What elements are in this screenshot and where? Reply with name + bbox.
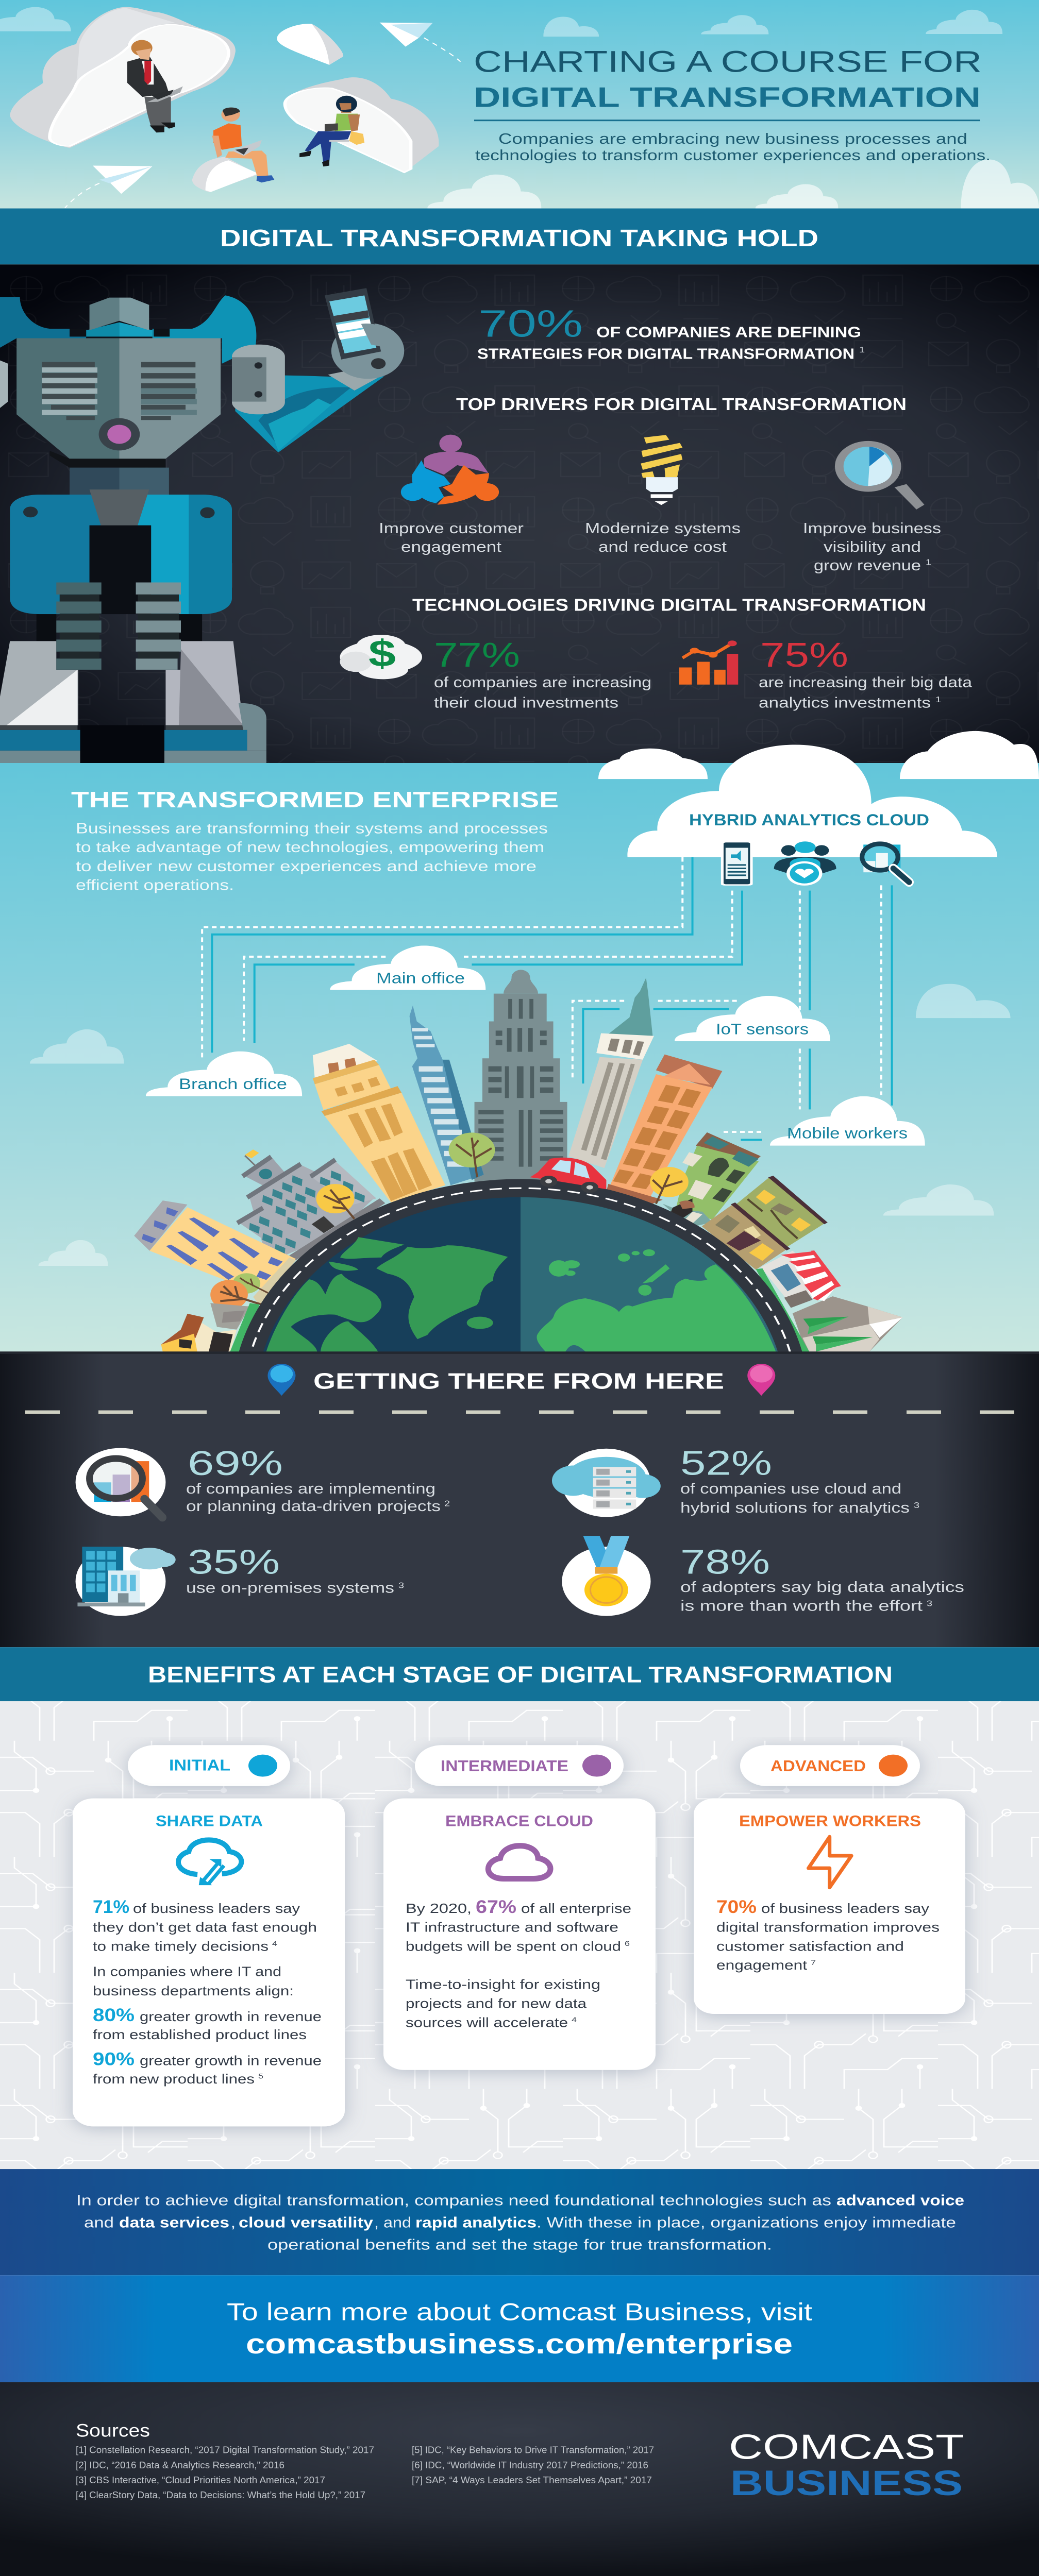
- land: western hemisphere: [266, 1237, 508, 1351]
- card: share data: 71%: [93, 1896, 129, 1917]
- subtitle: technologies to transform customer experiences and operations.: [475, 147, 991, 164]
- panel: transformed enterprise sky: [0, 731, 1039, 1621]
- stat: 78% worth the effort: [680, 1543, 964, 1615]
- stat: 69% data-driven projects: or planning data-driven projects: [186, 1498, 441, 1515]
- person: man in suit: [127, 40, 183, 132]
- building: olive townhouse: [702, 1176, 828, 1270]
- card: share data: from established product lines: [93, 2028, 307, 2042]
- card: share data: greater growth in revenue: [140, 2054, 322, 2069]
- text: modernize systems: [585, 520, 741, 555]
- card: share data: to make timely decisions: [93, 1939, 269, 1954]
- card: embrace cloud: By 2020,: [406, 1901, 472, 1916]
- heading band: digital transformation taking hold: [0, 209, 1039, 264]
- icon: magnifier: [835, 441, 925, 510]
- text: improve customer engagement: Improve customer: [379, 520, 524, 537]
- title: DIGITAL TRANSFORMATION: [474, 81, 981, 113]
- land: eastern hemisphere: [537, 1249, 776, 1351]
- heading: getting there from here: GETTING THERE FROM HERE: [313, 1368, 724, 1394]
- text: modernize systems: and reduce cost: [598, 538, 727, 555]
- label: hybrid analytics cloud: HYBRID ANALYTICS CLOUD: [689, 811, 929, 829]
- illustration: people on clouds: [10, 7, 461, 208]
- trees: centre: [448, 1132, 689, 1204]
- illustration: red car: [530, 1158, 606, 1193]
- heading band: digital transformation taking hold: DIGITAL TRANSFORMATION TAKING HOLD: [220, 226, 818, 251]
- stat: 69% data-driven projects: 69%: [188, 1445, 283, 1483]
- card: embrace cloud: 4: [572, 2016, 577, 2024]
- panel: foundational technologies: operational benefits and set the stage for true transformation.: [267, 2236, 772, 2253]
- pill: advanced: ADVANCED: [770, 1757, 866, 1775]
- card: embrace cloud: Time-to-insight for existing: [406, 1977, 600, 1992]
- icon: cloud servers: [552, 1449, 661, 1517]
- heading: sources: Sources: [76, 2420, 150, 2441]
- cloud: small bottom: [192, 157, 258, 192]
- panel: benefits circuit background: [0, 1701, 1039, 2169]
- globe and road: [232, 1179, 809, 1621]
- text: improve business visibility: Improve business: [803, 520, 941, 537]
- icon: data magnifier: [76, 1448, 165, 1517]
- callout: iot sensors: IoT sensors: [716, 1021, 809, 1038]
- stat: 69% data-driven projects: 2: [444, 1499, 450, 1508]
- subtitle: [475, 130, 991, 164]
- stat: 35% on-premises: 35%: [188, 1543, 280, 1581]
- callout: mobile workers: Mobile workers: [787, 1125, 908, 1142]
- stat: 70% of companies: [477, 302, 865, 362]
- stat: 70% of companies: 1: [859, 345, 865, 354]
- source list left: [2] IDC, “2016 Data & Analytics Research,” 2016: [76, 2460, 284, 2470]
- panel: foundational technologies: rapid analytics: [415, 2214, 537, 2231]
- stat: 77% cloud investments: [434, 636, 651, 711]
- icon: paper plane top: [380, 23, 461, 62]
- text: transformed enterprise description: to take advantage of new technologies, empowering them: [76, 839, 544, 856]
- text: modernize systems: Modernize systems: [585, 520, 741, 537]
- person: woman in green: [299, 96, 364, 166]
- stat: 77% cloud investments: their cloud investments: [434, 694, 618, 711]
- card: share data: they don’t get data fast enough: [93, 1920, 317, 1935]
- text: improve business visibility: visibility and: [824, 538, 921, 555]
- source list right: [6] IDC, “Worldwide IT Industry 2017 Predictions,” 2016: [412, 2460, 648, 2470]
- card: embrace cloud: 6: [625, 1940, 630, 1948]
- card: share data: 80%: [93, 2005, 135, 2025]
- cloud: large: [10, 7, 236, 148]
- heading: the transformed enterprise: THE TRANSFORMED ENTERPRISE: [71, 787, 559, 812]
- panel: foundational technologies: . With these in place, organizations enjoy immediate: [537, 2214, 956, 2231]
- card: share data: of business leaders say: [133, 1901, 300, 1916]
- icon: cloud transfer: [178, 1840, 241, 1885]
- stat: 52% cloud and hybrid: of companies use cloud and: [680, 1480, 901, 1497]
- stat: 77% cloud investments: of companies are increasing: [434, 674, 651, 691]
- text: improve business visibility: [803, 520, 941, 574]
- stat: 78% worth the effort: of adopters say big data analytics: [680, 1579, 964, 1596]
- pill: advanced: [740, 1745, 920, 1786]
- cloud: small top: [277, 24, 343, 65]
- text: improve customer engagement: engagement: [401, 538, 502, 555]
- source list right: [412, 2445, 654, 2485]
- card: embrace cloud: sources will accelerate: [406, 2015, 568, 2030]
- icon: paper plane bottom: [65, 165, 153, 208]
- title: CHARTING A COURSE FOR: [474, 45, 982, 78]
- source list left: [3] CBS Interactive, “Cloud Priorities North America,” 2017: [76, 2475, 325, 2485]
- person: man in orange: [212, 108, 274, 182]
- icon: puzzle people: [401, 435, 499, 505]
- panel: foundational technologies: data services: [119, 2214, 229, 2231]
- callout: branch office: Branch office: [179, 1076, 287, 1093]
- stat: 35% on-premises: 3: [398, 1581, 404, 1590]
- card: share data: 90%: [93, 2049, 135, 2069]
- heading band: benefits: BENEFITS AT EACH STAGE OF DIGITAL TRANSFORMATION: [148, 1662, 893, 1687]
- source list left: [1] Constellation Research, “2017 Digital Transformation Study,” 2017: [76, 2445, 374, 2455]
- stat: 35% on-premises: use on-premises systems: [186, 1580, 394, 1596]
- stat: 70% of companies: OF COMPANIES ARE DEFINING: [596, 324, 861, 341]
- card: empower workers: 7: [811, 1959, 816, 1967]
- illustration: robot: [0, 288, 404, 763]
- card: empower workers: [694, 1799, 965, 2014]
- text: transformed enterprise description: Businesses are transforming their systems and processes: [76, 820, 548, 837]
- icon: cloud dollar: $: [368, 633, 396, 675]
- callout: branch office: [146, 1052, 302, 1096]
- panel: foundational technologies: advanced voice: [836, 2192, 964, 2209]
- pill: initial: INITIAL: [169, 1756, 230, 1774]
- storefront: [761, 1250, 841, 1308]
- robot shoulder: [232, 345, 285, 414]
- card: embrace cloud: of all enterprise: [521, 1901, 631, 1916]
- panel: call to action: To learn more about Comcast Business, visit: [227, 2298, 812, 2326]
- icon: lightning bolt: [809, 1837, 851, 1888]
- card: share data: [73, 1799, 345, 2126]
- stat: 52% cloud and hybrid: 3: [914, 1501, 919, 1510]
- stat: 78% worth the effort: is more than worth the effort: [680, 1598, 923, 1615]
- building: left teal block: [237, 1149, 386, 1260]
- stat: 35% on-premises: [186, 1543, 404, 1596]
- card: share data: greater growth in revenue: [140, 2009, 322, 2024]
- card: embrace cloud: budgets will be spent on cloud: [406, 1939, 621, 1954]
- card: empower workers: customer satisfaction and: [716, 1939, 904, 1954]
- text: improve customer engagement: [379, 520, 524, 555]
- stat: 75% big data analytics: are increasing their big data: [759, 674, 972, 691]
- stat: 52% cloud and hybrid: [680, 1444, 919, 1516]
- subtitle: Companies are embracing new business processes and: [498, 130, 967, 147]
- card: embrace cloud: EMBRACE CLOUD: [445, 1812, 593, 1829]
- source list left: [4] ClearStory Data, “Data to Decisions: What’s the Hold Up?,” 2017: [76, 2490, 365, 2500]
- building: left yellow long: [134, 1200, 296, 1309]
- text: improve business visibility: 1: [926, 558, 931, 567]
- stat: 75% big data analytics: 75%: [760, 636, 848, 674]
- robot legs: [0, 583, 266, 763]
- card: embrace cloud: [383, 1799, 656, 2070]
- card: share data: In companies where IT and: [93, 1964, 281, 1979]
- building: central tower: [475, 970, 567, 1182]
- logo: comcast business: COMCAST: [729, 2427, 964, 2466]
- stat: 70% of companies: STRATEGIES FOR DIGITAL TRANSFORMATION: [477, 346, 854, 362]
- panel: foundational technologies: ,: [230, 2214, 236, 2231]
- stat: 77% cloud investments: 77%: [434, 636, 520, 674]
- icon: cloud outline: [488, 1846, 550, 1878]
- heading: top drivers: TOP DRIVERS FOR DIGITAL TRANSFORMATION: [456, 395, 907, 414]
- stat: 78% worth the effort: 78%: [680, 1543, 770, 1581]
- callout: iot sensors: [675, 996, 830, 1041]
- logo: comcast business: BUSINESS: [730, 2463, 963, 2503]
- panel: footer: [0, 2382, 1039, 2576]
- building: right grey tower: [568, 978, 654, 1168]
- icon: pink map pin: [747, 1364, 775, 1396]
- card: share data: 4: [272, 1940, 277, 1948]
- cloud: hybrid analytics: [598, 731, 1039, 857]
- stat: 75% big data analytics: analytics investments: [759, 694, 931, 711]
- icon: blue map pin: [267, 1364, 295, 1396]
- card: empower workers: 70%: [716, 1896, 757, 1917]
- panel: call to action: [0, 2275, 1039, 2382]
- card: empower workers: engagement: [716, 1958, 808, 1973]
- cloud: right: [285, 77, 439, 173]
- stat: 69% data-driven projects: [186, 1445, 450, 1515]
- panel: getting there from here: [0, 1351, 1039, 1647]
- source list right: [7] SAP, “4 Ways Leaders Set Themselves Apart,” 2017: [412, 2475, 652, 2485]
- panel: hero sky: [0, 0, 1039, 209]
- building: orange: [606, 1055, 722, 1204]
- building: blue tower: [410, 1006, 484, 1185]
- callout: mobile workers: [770, 1096, 925, 1146]
- source list left: [76, 2445, 374, 2500]
- card: empower workers: EMPOWER WORKERS: [739, 1812, 921, 1829]
- card: share data: business departments align:: [93, 1984, 294, 1998]
- icon: medal: [562, 1536, 651, 1616]
- title: [474, 45, 982, 113]
- building: green house: [663, 1132, 761, 1228]
- icon: phone: [721, 841, 753, 886]
- stat: 70% of companies: 70%: [478, 302, 583, 345]
- stat: 75% big data analytics: 1: [935, 695, 941, 704]
- panel: foundational technologies: [0, 2169, 1039, 2275]
- heading: technologies driving: TECHNOLOGIES DRIVING DIGITAL TRANSFORMATION: [412, 596, 926, 615]
- text: improve business visibility: grow revenue: [814, 557, 921, 574]
- source list right: [5] IDC, “Key Behaviors to Drive IT Transformation,” 2017: [412, 2445, 654, 2455]
- panel: foundational technologies: cloud versatility: [239, 2214, 373, 2231]
- background clouds: [30, 984, 1011, 1266]
- panel: dark robot section: [0, 264, 1039, 763]
- right neighbourhood: [702, 1176, 903, 1351]
- heading band: benefits: [0, 1647, 1039, 1701]
- illustration: city and globe: [134, 970, 761, 1351]
- stat: 52% cloud and hybrid: 52%: [680, 1444, 772, 1482]
- robot phone: [325, 288, 402, 360]
- text: transformed enterprise description: [76, 820, 548, 894]
- card: embrace cloud: 67%: [476, 1896, 516, 1917]
- callout: main office: [330, 945, 485, 990]
- pill: intermediate: [415, 1745, 624, 1786]
- building: yellow: [313, 1044, 445, 1202]
- icon: on-premises buildings: [76, 1547, 176, 1616]
- panel: call to action: comcastbusiness.com/enterprise: [246, 2328, 793, 2360]
- text: transformed enterprise description: to deliver new customer experiences and achieve more: [76, 858, 537, 875]
- text: transformed enterprise description: efficient operations.: [76, 877, 234, 894]
- mountain and pines: [793, 1296, 903, 1351]
- robot chest: [16, 338, 221, 468]
- card: embrace cloud: IT infrastructure and software: [406, 1920, 618, 1935]
- card: empower workers: of business leaders say: [761, 1901, 930, 1916]
- stat: 69% data-driven projects: of companies are implementing: [186, 1480, 435, 1497]
- icon: cloud dollar: [340, 633, 422, 679]
- robot torso and hips: [10, 468, 232, 614]
- stat: 78% worth the effort: 3: [927, 1599, 932, 1608]
- pill: initial: [128, 1745, 290, 1786]
- icon: customers heart: [774, 841, 836, 886]
- robot arm: [235, 323, 404, 452]
- building: small house: [161, 1303, 260, 1351]
- icon: analytics chart: [679, 640, 738, 685]
- icon: light bulb: [641, 435, 682, 505]
- panel: foundational technologies: , and: [374, 2214, 411, 2231]
- network connection lines: [202, 857, 892, 1140]
- card: embrace cloud: projects and for new data: [406, 1996, 586, 2011]
- stat: 52% cloud and hybrid: hybrid solutions for analytics: [680, 1499, 910, 1516]
- background clouds: [0, 7, 1039, 209]
- card: share data: SHARE DATA: [156, 1812, 263, 1829]
- card: share data: 5: [258, 2073, 263, 2080]
- panel: foundational technologies: and: [84, 2214, 114, 2231]
- panel: foundational technologies: In order to achieve digital transformation, companies need foundational technologies such as: [76, 2192, 831, 2209]
- card: share data: from new product lines: [93, 2072, 255, 2087]
- callout: main office: Main office: [376, 970, 465, 987]
- icon: magnifier analytics: [862, 844, 909, 882]
- logo: comcast business: [729, 2427, 964, 2503]
- pill: intermediate: INTERMEDIATE: [441, 1757, 568, 1775]
- card: empower workers: digital transformation improves: [716, 1920, 940, 1935]
- stat: 75% big data analytics: [759, 636, 972, 711]
